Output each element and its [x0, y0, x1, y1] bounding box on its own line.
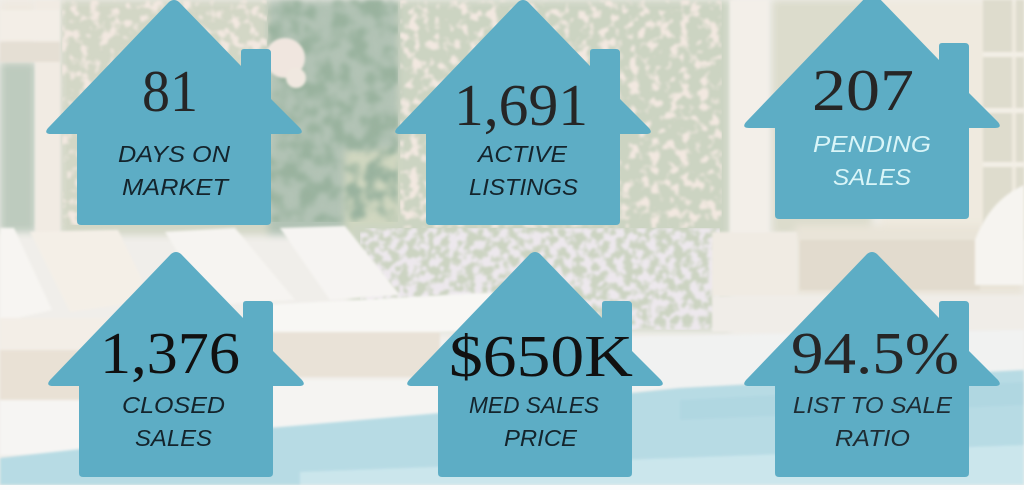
label: list to sale ratio: LIST TO SALE — [793, 392, 952, 418]
label: list to sale ratio: RATIO — [835, 425, 910, 451]
label: med sales price: MED SALES — [469, 392, 599, 418]
house shape — [395, 0, 651, 225]
background: hydrangea clusters — [360, 228, 720, 330]
house card: closed sales — [48, 252, 304, 477]
label: days on market: MARKET — [122, 174, 230, 200]
house shape — [46, 0, 302, 225]
value: 1,691: 1,691 — [454, 72, 588, 138]
label: closed sales: SALES — [135, 425, 212, 451]
house shape — [744, 0, 1000, 219]
label: active listings: ACTIVE — [476, 141, 567, 167]
label: closed sales: CLOSED — [122, 392, 225, 418]
house card: days on market — [46, 0, 302, 225]
background: foliage and architecture — [0, 0, 1024, 330]
house shape — [48, 252, 304, 477]
label: pending sales: PENDING — [813, 131, 931, 157]
label: pending sales: SALES — [833, 164, 911, 190]
value: 94.5%: 94.5% — [791, 320, 959, 386]
house card: list to sale ratio — [744, 252, 1000, 477]
value: 81: 81 — [142, 58, 198, 124]
label: med sales price: PRICE — [504, 425, 577, 451]
value: $650K: $650K — [449, 323, 633, 389]
house card: pending sales — [744, 0, 1000, 219]
value: 207: 207 — [812, 57, 914, 123]
house card: active listings — [395, 0, 651, 225]
house card: median sales price — [407, 252, 663, 477]
house shape — [407, 252, 663, 477]
label: active listings: LISTINGS — [469, 174, 578, 200]
background: swimming pool — [0, 370, 1024, 485]
label: days on market: DAYS ON — [118, 141, 230, 167]
value: 1,376: 1,376 — [100, 320, 240, 386]
background: pergola and columns — [0, 0, 1024, 297]
background: sun loungers — [0, 185, 1024, 455]
background: rose clusters — [400, 0, 722, 228]
background: dark foliage mottling — [268, 0, 398, 222]
house shape — [744, 252, 1000, 477]
